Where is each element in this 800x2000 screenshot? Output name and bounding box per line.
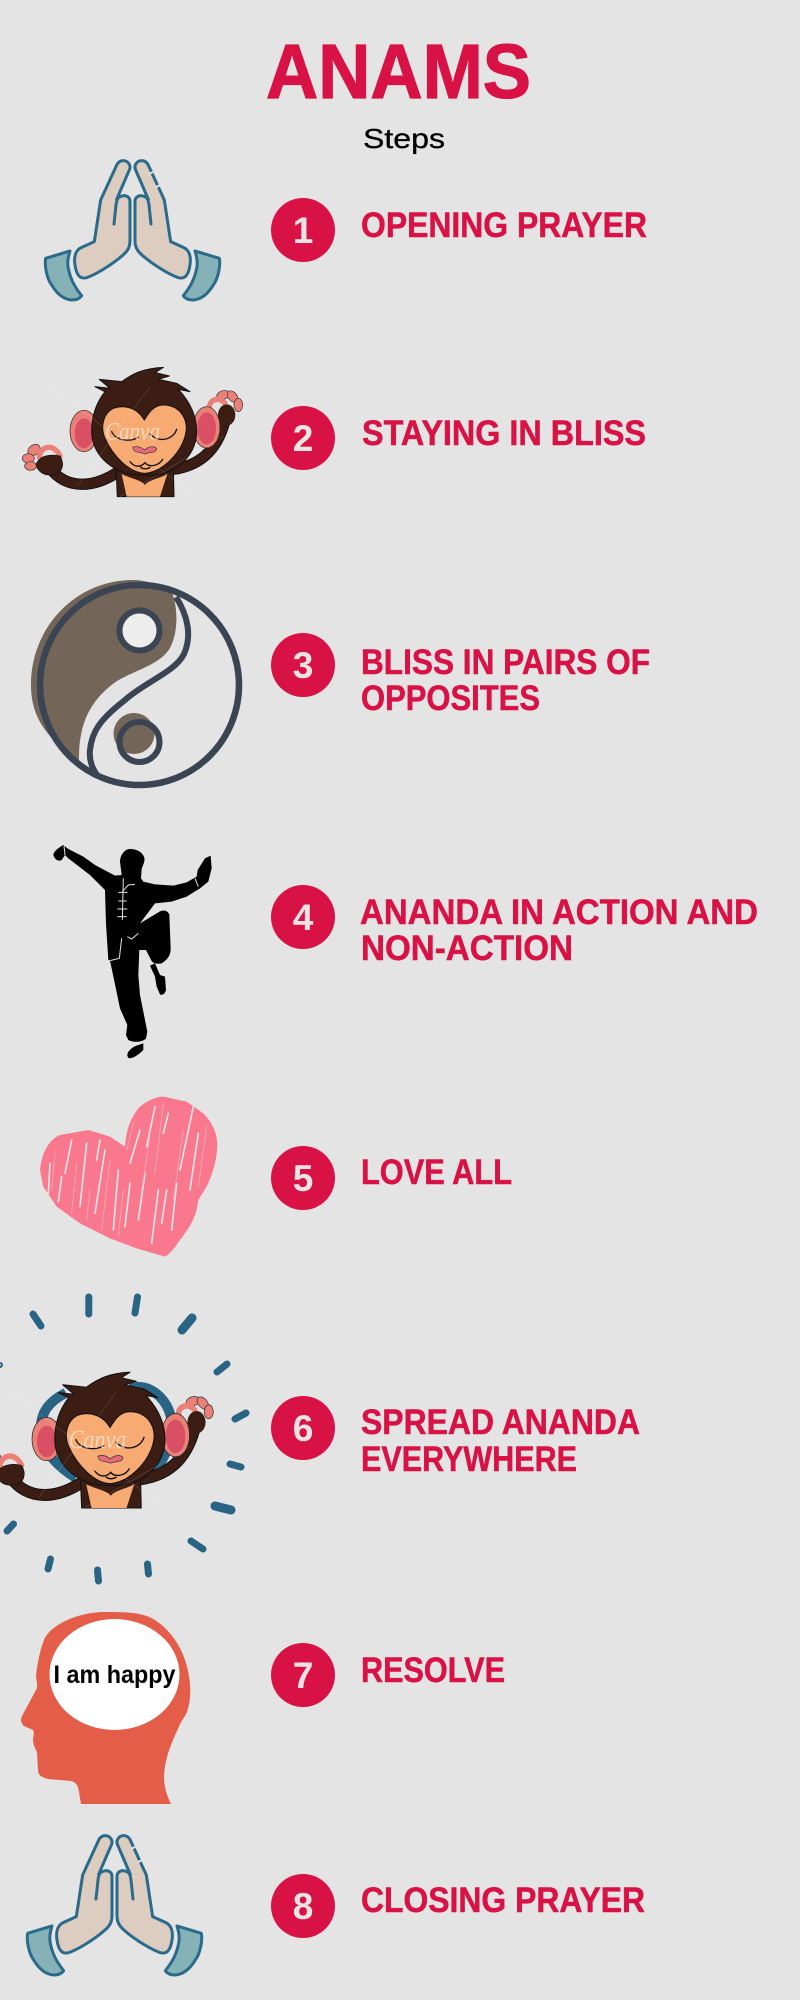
icon: scribbled heart bbox=[40, 1097, 217, 1257]
step 2: 2 bbox=[293, 418, 313, 459]
step 5 bbox=[271, 1146, 512, 1210]
step 2: STAYING IN BLISS bbox=[362, 414, 646, 453]
icon: praying hands bottom bbox=[27, 1836, 202, 1975]
step 7: RESOLVE bbox=[361, 1651, 505, 1690]
step 5: LOVE ALL bbox=[361, 1153, 512, 1192]
step 3: OPPOSITES bbox=[361, 679, 540, 718]
step 4: 4 bbox=[293, 897, 314, 938]
step 5: 5 bbox=[293, 1158, 313, 1199]
step 4: ANANDA IN ACTION AND bbox=[360, 893, 758, 932]
icon: head with resolve bbox=[21, 1612, 190, 1804]
step 6: 6 bbox=[293, 1408, 313, 1449]
step 4 bbox=[271, 885, 758, 968]
step 6: EVERYWHERE bbox=[361, 1440, 577, 1479]
icon: praying hands top bbox=[45, 161, 220, 300]
subtitle: Steps bbox=[363, 123, 445, 154]
step 1 bbox=[271, 198, 647, 262]
resolve text: I am happy bbox=[54, 1661, 176, 1689]
step 8: 8 bbox=[293, 1886, 313, 1927]
step 3: 3 bbox=[293, 645, 313, 686]
step 7: 7 bbox=[293, 1655, 313, 1696]
icon: meditating monkey bbox=[22, 367, 243, 497]
step 6: SPREAD ANANDA bbox=[361, 1403, 640, 1442]
step 2 bbox=[271, 406, 646, 470]
step 8 bbox=[271, 1874, 645, 1938]
step 4: NON-ACTION bbox=[361, 929, 573, 968]
watermark: Canva bbox=[105, 417, 160, 445]
step 6 bbox=[271, 1396, 640, 1479]
step 1: OPENING PRAYER bbox=[361, 206, 647, 245]
icon: martial arts silhouette bbox=[53, 845, 212, 1058]
icon: yin yang bbox=[31, 580, 239, 785]
icon: blue ring behind monkey bbox=[41, 1387, 171, 1478]
icon: meditating monkey with halo bbox=[0, 1372, 213, 1508]
icon: radiating blue dashes bbox=[0, 1297, 246, 1581]
step 3: BLISS IN PAIRS OF bbox=[361, 643, 650, 682]
step 7 bbox=[271, 1643, 505, 1707]
step 1: 1 bbox=[293, 210, 313, 251]
step 8: CLOSING PRAYER bbox=[361, 1881, 645, 1920]
title: ANAMS bbox=[266, 29, 531, 115]
watermark: Canva bbox=[69, 1424, 127, 1454]
step 3 bbox=[271, 633, 650, 718]
